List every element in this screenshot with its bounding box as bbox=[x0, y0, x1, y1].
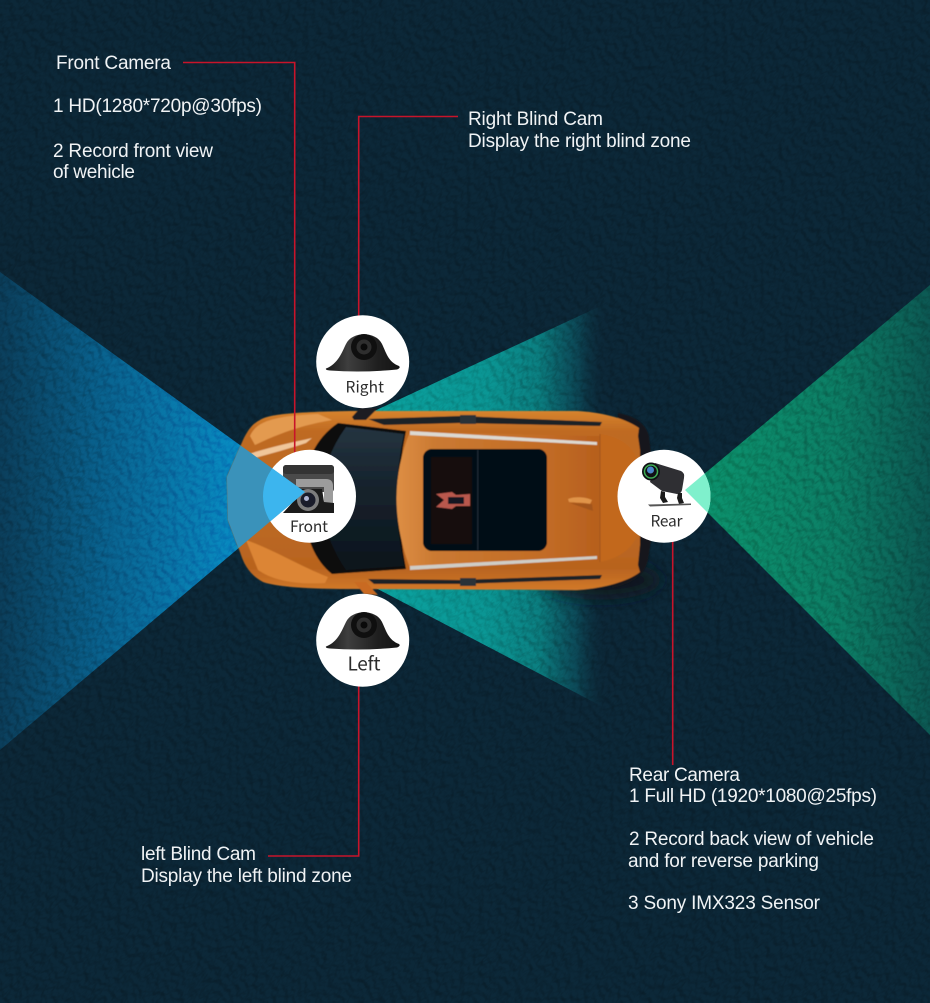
rear camera badge bbox=[618, 450, 710, 543]
text: front camera: Front Camera bbox=[56, 53, 171, 74]
connector: front camera bbox=[183, 62, 295, 457]
right side window bbox=[368, 416, 602, 426]
text: right blind cam bbox=[468, 109, 691, 152]
text: front camera: of wehicle bbox=[53, 162, 135, 183]
windshield frame bbox=[303, 423, 406, 574]
top pillar bbox=[460, 415, 476, 424]
sunroof divider bbox=[477, 450, 478, 550]
seat shadow bbox=[448, 497, 464, 504]
teal field of view: right camera bbox=[372, 304, 605, 412]
car body bbox=[227, 411, 640, 590]
right camera badge bbox=[316, 315, 409, 408]
lower silver rail bbox=[410, 556, 597, 570]
mint view overlay on rear badge bbox=[685, 474, 710, 512]
door handle bbox=[568, 497, 592, 504]
icon: left dome camera bbox=[326, 612, 400, 650]
seats seen through sunroof bbox=[436, 492, 470, 509]
icon: right dome camera bbox=[326, 334, 400, 372]
text: right blind cam: Right Blind Cam bbox=[468, 109, 603, 130]
text: rear camera: Rear Camera bbox=[629, 765, 740, 786]
label: Front: Front bbox=[290, 515, 328, 537]
door handle shadow bbox=[570, 503, 593, 511]
front camera badge bbox=[263, 450, 356, 543]
hatch seam bbox=[599, 434, 601, 562]
icon: rear camera bbox=[642, 462, 691, 506]
text: rear camera: 3 Sony IMX323 Sensor bbox=[628, 893, 821, 914]
rear hatch bbox=[600, 434, 640, 562]
upper silver rail bbox=[410, 431, 597, 445]
label: Left: Left bbox=[348, 650, 380, 676]
text: right blind cam: Display the right blind zone bbox=[468, 131, 691, 152]
text: rear camera: 1 Full HD (1920*1080@25fps) bbox=[629, 786, 877, 807]
roof bbox=[396, 432, 600, 568]
label: Right: Right bbox=[346, 376, 384, 398]
mirror right bbox=[352, 408, 378, 420]
left side window bbox=[368, 575, 602, 584]
connector: left camera bbox=[268, 684, 359, 856]
rear dark bumper bbox=[612, 413, 652, 588]
text: front camera bbox=[53, 53, 262, 183]
sunroof bbox=[423, 449, 547, 551]
green field of view: rear camera bbox=[685, 285, 930, 735]
text: rear camera: 2 Record back view of vehicle bbox=[629, 829, 874, 850]
text: left blind cam: Display the left blind zone bbox=[141, 866, 352, 887]
text: front camera: 1 HD(1280*720p@30fps) bbox=[53, 96, 262, 117]
icon: front dash camera bbox=[283, 465, 334, 513]
text: left blind cam bbox=[141, 844, 352, 887]
bottom pillar bbox=[460, 578, 476, 586]
teal field of view: left camera bbox=[372, 586, 605, 708]
blue view overlay across car and badge bbox=[227, 446, 305, 548]
car shadow bbox=[538, 560, 662, 600]
sunroof rear interior bbox=[431, 457, 472, 544]
hood streak bbox=[240, 438, 312, 462]
car top view bbox=[227, 408, 662, 600]
text: front camera: 2 Record front view bbox=[53, 141, 213, 162]
mirror left bbox=[354, 582, 378, 595]
text: rear camera: and for reverse parking bbox=[628, 851, 819, 872]
blue field of view: front camera bbox=[0, 272, 305, 750]
left camera badge bbox=[316, 594, 409, 687]
windshield glass bbox=[322, 427, 404, 570]
connector: rear camera bbox=[672, 538, 674, 765]
connector: right camera bbox=[359, 116, 458, 320]
label: Rear: Rear bbox=[650, 510, 683, 532]
hood highlight top bbox=[250, 414, 332, 445]
lower hood highlight bbox=[246, 540, 328, 583]
text: left blind cam: left Blind Cam bbox=[141, 844, 256, 865]
text: rear camera bbox=[628, 765, 877, 914]
